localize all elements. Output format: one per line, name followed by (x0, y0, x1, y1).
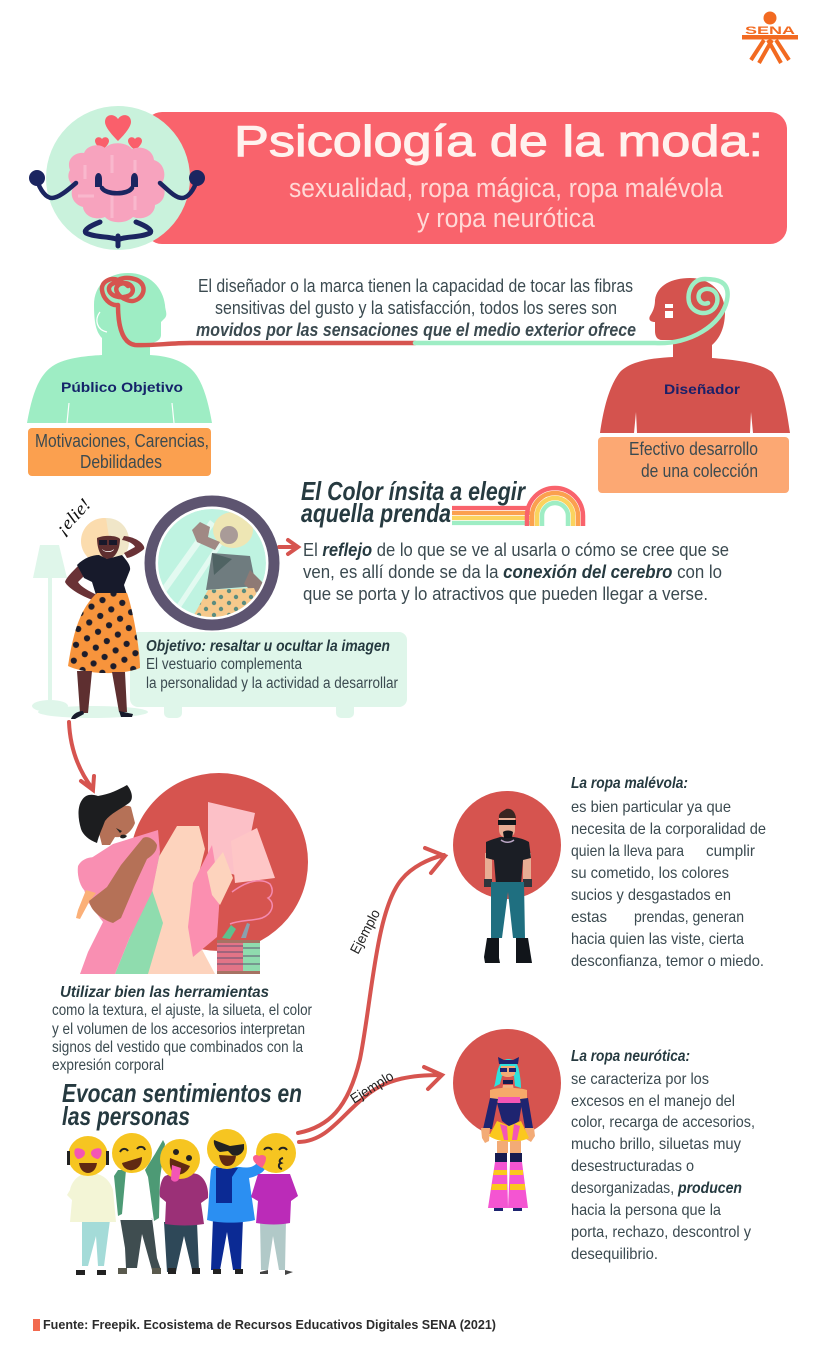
heading: el color (301, 476, 527, 528)
text: la ropa malévola: estas (571, 909, 607, 926)
text: utilizar bien las herramientas (52, 984, 312, 1074)
icon: mirror (150, 501, 274, 625)
title banner background (145, 112, 787, 244)
box: motivaciones (28, 428, 211, 476)
icon: lamp (32, 545, 68, 712)
text: la ropa neurótica: color, recarga de accesorios, (571, 1114, 755, 1131)
text: la ropa neurótica: desestructuradas o (571, 1158, 694, 1175)
arm slits and ear (67, 312, 174, 423)
text: la ropa neurótica: hacia la persona que la (571, 1202, 721, 1219)
subtitle: sexualidad, ropa mágica, ropa malévola (289, 173, 724, 203)
label: ¡elie!: ¡elie! (51, 494, 95, 539)
objetivo text (146, 638, 398, 692)
text: la ropa malévola (571, 775, 766, 970)
figure: ropa malévola (453, 791, 561, 963)
icon: woman with polka dot skirt (65, 518, 144, 719)
label: diseñador: Diseñador (664, 382, 741, 397)
icon: SENA logo: SENA (745, 25, 795, 37)
box: motivaciones: Debilidades (80, 452, 162, 472)
box: efectivo desarrollo (598, 437, 789, 493)
heading: evocan sentimientos: las personas (62, 1101, 190, 1131)
paragraph: reflejo (303, 540, 729, 604)
label: ejemplo 2: Ejemplo (347, 1067, 396, 1107)
text: utilizar bien las herramientas: Utilizar bien las herramientas (60, 984, 269, 1001)
illustration: tailor with mannequin (76, 773, 308, 974)
box: efectivo desarrollo: Efectivo desarrollo (629, 439, 758, 459)
icon: SENA logo (742, 12, 798, 63)
text: la ropa neurótica: excesos en el manejo del (571, 1093, 735, 1110)
text: la ropa neurótica: porta, rechazo, descontrol y (571, 1224, 751, 1241)
objetivo text: la personalidad y la actividad a desarrollar (146, 675, 398, 692)
text: la ropa neurótica: desorganizadas, producen (571, 1180, 742, 1197)
intro text: El diseñador o la marca tienen la capacidad de tocar las fibras (198, 276, 633, 296)
text: la ropa malévola: es bien particular ya que (571, 799, 731, 816)
paragraph: reflejo: que se porta y lo atractivos que pueden llegar a verse. (303, 584, 708, 604)
text: utilizar bien las herramientas: expresión corporal (52, 1057, 164, 1074)
intro text (196, 276, 636, 340)
text: la ropa malévola: desconfianza, temor o miedo. (571, 953, 764, 970)
header banner (145, 112, 787, 244)
heading: el color: El Color ínsita a elegir (301, 476, 527, 506)
figure: diseñador (415, 278, 790, 433)
panel: objetivo (32, 545, 407, 718)
icon: rainbow (452, 488, 583, 526)
paragraph: reflejo: ven, es allí donde se da la conexión del cerebro con lo (303, 562, 722, 582)
illustration: emoji people (67, 1129, 298, 1275)
figure: público objetivo (27, 273, 415, 423)
person 5 (251, 1133, 298, 1275)
text: la ropa malévola: quien la lleva para (571, 843, 684, 860)
text: la ropa malévola: hacia quien las viste, cierta (571, 931, 744, 948)
title: Psicología de la moda: (234, 117, 763, 166)
text: utilizar bien las herramientas: signos del vestido que combinados con la (52, 1039, 303, 1056)
heading: evocan sentimientos (62, 1078, 302, 1131)
arrow: to tailor (69, 722, 94, 790)
objetivo text: Objetivo: resaltar u ocultar la imagen (146, 638, 390, 655)
figure: ropa neurótica (453, 1029, 561, 1211)
text: la ropa neurótica: La ropa neurótica: (571, 1048, 690, 1065)
icon: meditating brain (29, 106, 205, 250)
box: motivaciones: Motivaciones, Carencias, (35, 431, 209, 451)
text: la ropa neurótica: desequilibrio. (571, 1246, 658, 1263)
spiral nerve (415, 279, 728, 343)
heading: evocan sentimientos: Evocan sentimientos en (62, 1078, 302, 1108)
footer source: Fuente: Freepik. Ecosistema de Recursos Educativos Digitales SENA (2021) (43, 1318, 496, 1332)
text: la ropa neurótica (571, 1048, 755, 1263)
person 4 (207, 1129, 265, 1274)
arrow: mirror to text (279, 540, 298, 554)
text: utilizar bien las herramientas: como la textura, el ajuste, la silueta, el color (52, 1002, 312, 1019)
person 3 (160, 1139, 208, 1274)
text: la ropa malévola: su cometido, los colores (571, 865, 729, 882)
text: la ropa neurótica: se caracteriza por los (571, 1071, 709, 1088)
head and body silhouette (27, 273, 212, 423)
intro text: movidos por las sensaciones que el medio exterior ofrece (196, 320, 636, 340)
tangled brain nerve (102, 278, 415, 345)
person 1 (67, 1136, 116, 1275)
text: la ropa malévola: La ropa malévola: (571, 775, 688, 792)
arrow: to ropa neurótica (299, 1067, 442, 1142)
box: efectivo desarrollo: de una colección (641, 461, 758, 481)
label: ejemplo 1: Ejemplo (347, 906, 383, 956)
text: la ropa malévola: prendas, generan (634, 909, 744, 926)
paragraph: reflejo: El reflejo de lo que se ve al usarla o cómo se cree que se (303, 540, 729, 560)
text: utilizar bien las herramientas: y el volumen de los accesorios interpretan (52, 1021, 305, 1038)
sofa background (38, 632, 407, 718)
head and body silhouette (600, 278, 790, 433)
text: la ropa malévola: sucios y desgastados en (571, 887, 731, 904)
objetivo text: El vestuario complementa (146, 656, 302, 673)
heading: el color: aquella prenda (301, 498, 451, 528)
text: la ropa malévola: cumplir (706, 843, 756, 860)
text: la ropa neurótica: mucho brillo, siluetas muy (571, 1136, 741, 1153)
eye marks and arm slits (634, 304, 753, 433)
person 2 (112, 1133, 165, 1274)
arrow: to ropa malévola (298, 848, 445, 1133)
label: público objetivo: Público Objetivo (61, 379, 183, 395)
subtitle (289, 173, 724, 233)
text: la ropa malévola: necesita de la corporalidad de (571, 821, 766, 838)
subtitle: y ropa neurótica (417, 203, 596, 233)
intro text: sensitivas del gusto y la satisfacción, todos los seres son (215, 298, 617, 318)
